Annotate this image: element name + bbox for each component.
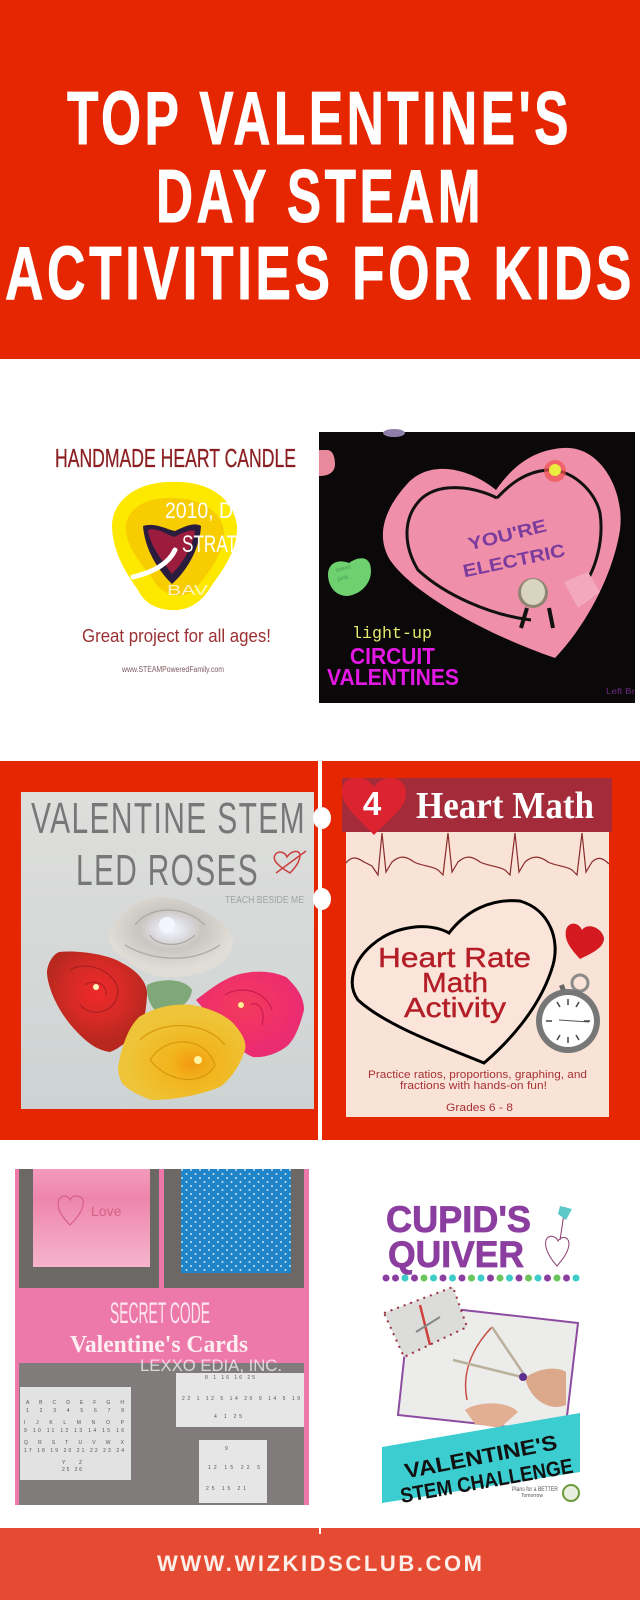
photo: code sheets: 22 1 12 5 14 20 9 14 5 19: [182, 1396, 300, 1402]
text: circuit valentines: [327, 625, 635, 696]
icon: yellow heart candle: STRAT: [182, 531, 237, 558]
heading: cupid's quiver: QUIVER: [388, 1234, 524, 1275]
icon: small red heart: [566, 924, 604, 959]
photo: code sheets: 17 18 19 20 21 22 23 24: [24, 1448, 124, 1454]
photo: code sheets: Y Z: [62, 1460, 82, 1466]
photo: bow and arrow: [398, 1304, 578, 1433]
banner: valentine's stem challenge: [382, 1413, 580, 1508]
text: great project: Great project for all ages!: [82, 626, 271, 646]
text: circuit valentines: VALENTINES: [327, 664, 459, 690]
connector: white circles on divider: [313, 807, 331, 910]
panel: secret code valentine's cards: SECRET CODE: [110, 1297, 210, 1330]
panel: secret code valentine's cards: [15, 1169, 309, 1505]
text: heart rate math activity: Math: [422, 967, 488, 998]
heading: candle: HANDMADE HEART CANDLE: [55, 443, 296, 473]
photo: code sheets: 25 15 21: [206, 1486, 246, 1492]
photo: code sheets: 25 26: [62, 1467, 82, 1473]
logo: plans for a better tomorrow: Plans for a BETTER: [512, 1487, 559, 1493]
panel: title banner: [0, 0, 640, 359]
icon: arrow and heart: [546, 1207, 569, 1266]
text: website: www.STEAMPoweredFamily.com: [121, 665, 224, 674]
text: lexxo edia watermark: LEXXO EDIA, INC.: [140, 1356, 282, 1375]
icon: red heart with number 4: [342, 778, 406, 835]
photo: code sheets: Q R S T U V W X: [24, 1440, 125, 1446]
heading: valentine stem led roses: LED ROSES: [76, 846, 259, 895]
icon: LED: [544, 460, 566, 482]
text: practice ratios: fractions with hands-on fun!: [400, 1080, 547, 1092]
heading: valentine stem led roses: [31, 794, 306, 895]
text: teach beside me: TEACH BESIDE ME: [225, 895, 304, 906]
icon: candy decorations: sweet: [335, 564, 352, 574]
title: DAY STEAM: [156, 154, 484, 238]
text: you're electric: [461, 515, 567, 581]
photos: painted cards: Love: [91, 1203, 122, 1219]
icon: red heart with number 4: 4: [363, 785, 382, 822]
text: circuit valentines: light-up: [352, 625, 432, 644]
text: practice ratios: Grades 6 - 8: [446, 1102, 513, 1114]
icon: yellow heart candle: BAV: [167, 582, 208, 599]
photo: code sheets: [19, 1363, 304, 1505]
text: practice ratios: [368, 1069, 587, 1114]
icon: ECG line: [346, 833, 609, 875]
panel: circuit valentines: [319, 429, 635, 703]
logo: plans for a better tomorrow: [512, 1485, 579, 1501]
photo: code sheets: 8 1 16 16 25: [205, 1375, 255, 1381]
panel: handmade heart candle: [55, 443, 296, 674]
title: [5, 76, 635, 315]
photo: code sheets: 12 15 22 5: [208, 1465, 260, 1471]
icon: pink paper heart: [383, 448, 621, 658]
circuit line: [407, 470, 601, 620]
photos: painted cards: [19, 1169, 304, 1288]
photo: small arrow card: [384, 1287, 467, 1357]
panel: LED roses: [21, 792, 314, 1109]
panel: cupid's quiver: [382, 1199, 580, 1508]
text: practice ratios: Practice ratios, proportions, graphing, and: [368, 1069, 587, 1081]
heading: cupid's quiver: [386, 1199, 531, 1275]
icon: stopwatch: [536, 975, 600, 1053]
icon: candy decorations: [319, 429, 405, 596]
icon: heart and arrow: [274, 851, 306, 873]
logo: plans for a better tomorrow: Tomorrow: [521, 1493, 543, 1499]
photo: code sheets: 1 2 3 4 5 6 7 8: [26, 1408, 124, 1414]
text: heart rate math activity: [378, 942, 531, 1023]
photo: code sheets: A B C D E F G H: [26, 1400, 124, 1406]
banner: valentine's stem challenge: STEM CHALLENGE: [399, 1455, 575, 1508]
icon: paper roses: [47, 897, 304, 1100]
heading: valentine stem led roses: VALENTINE STEM: [31, 794, 306, 843]
heading: cupid's quiver: CUPID'S: [386, 1199, 531, 1240]
icon: yellow heart candle: 2010, D: [165, 498, 233, 523]
heading: heart math: Heart Math: [416, 785, 594, 827]
text: website url: WWW.WIZKIDSCLUB.COM: [157, 1551, 482, 1576]
banner: valentine's stem challenge: VALENTINE'S: [403, 1431, 559, 1483]
photo: code sheets: 9 10 11 12 13 14 15 16: [24, 1428, 124, 1434]
icon: coin battery and tape: [518, 572, 600, 628]
panel: heart math: [342, 778, 612, 1117]
arrow fletching: [558, 1206, 572, 1220]
text: valentine's cards: Valentine's Cards: [70, 1332, 248, 1358]
icon: candy decorations: pink: [337, 574, 350, 583]
icon: yellow heart candle: [112, 482, 237, 610]
text: circuit valentines: CIRCUIT: [350, 643, 435, 669]
text: circuit valentines: Left Br: [606, 687, 635, 696]
dotted divider: [382, 1274, 580, 1282]
photo: code sheets: 9: [225, 1446, 228, 1452]
text: you're electric: YOU'RE: [466, 515, 548, 554]
header bar: [342, 778, 612, 832]
panel: footer: [0, 1528, 640, 1600]
text: you're electric: ELECTRIC: [461, 540, 567, 581]
photo: code sheets: I J K L M N O P: [24, 1420, 125, 1426]
panel: red middle band: [0, 761, 640, 1140]
text: heart rate math activity: Activity: [404, 992, 506, 1023]
icon: black outlined heart: [352, 901, 555, 1063]
photo: code sheets: 4 1 25: [214, 1414, 242, 1420]
text: heart rate math activity: Heart Rate: [378, 942, 531, 973]
